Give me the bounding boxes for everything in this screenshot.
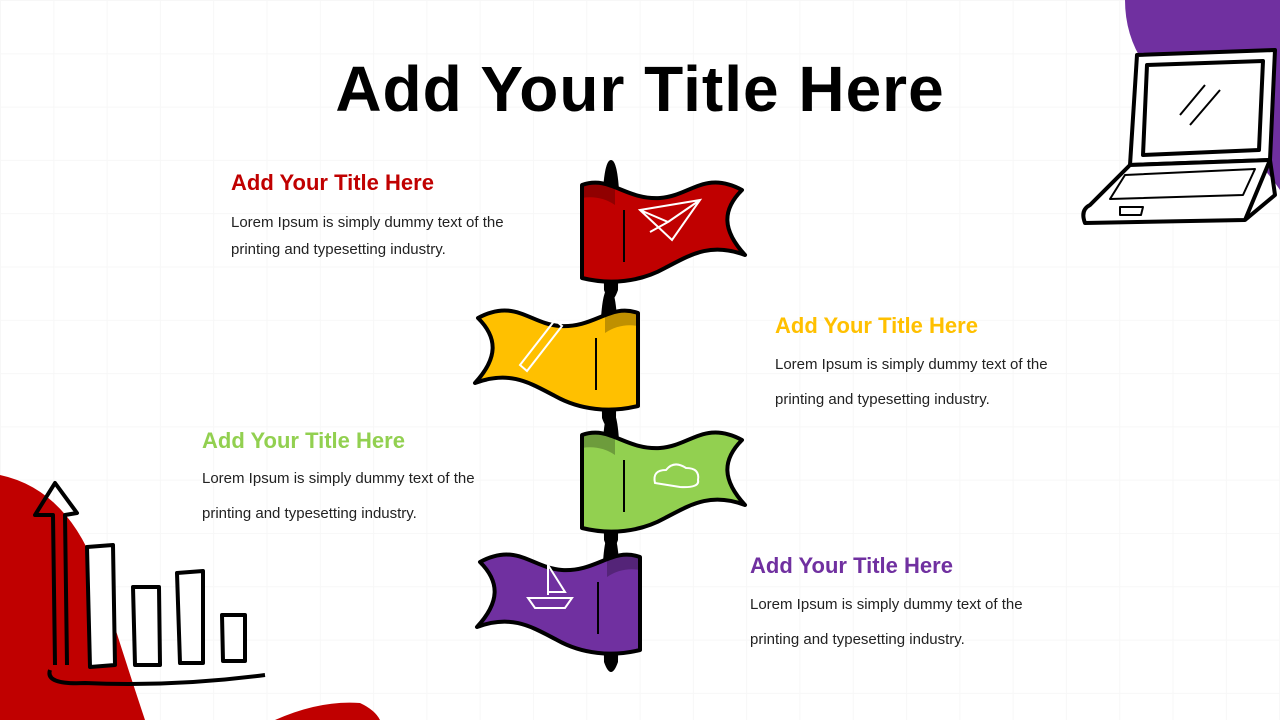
- text block 4: Add Your Title Here: [750, 553, 953, 578]
- text block 1: [231, 170, 504, 258]
- text block 3: Add Your Title Here: [202, 428, 405, 453]
- text block 2: [775, 313, 1048, 408]
- text block 2: printing and typesetting industry.: [775, 391, 990, 408]
- text block 1: printing and typesetting industry.: [231, 241, 446, 258]
- text block 4: printing and typesetting industry.: [750, 631, 965, 648]
- flag red: [582, 160, 745, 300]
- flag yellow: [475, 288, 638, 428]
- flag purple: [477, 532, 640, 672]
- text block 2: Lorem Ipsum is simply dummy text of the: [775, 356, 1048, 373]
- text block 1: Add Your Title Here: [231, 170, 434, 195]
- icon: laptop: [1081, 48, 1277, 225]
- text block 3: [202, 428, 475, 522]
- flag green: [582, 410, 745, 550]
- title: Add Your Title Here: [335, 53, 945, 125]
- text block 4: Lorem Ipsum is simply dummy text of the: [750, 596, 1023, 613]
- text block 3: Lorem Ipsum is simply dummy text of the: [202, 470, 475, 487]
- text block 1: Lorem Ipsum is simply dummy text of the: [231, 214, 504, 231]
- icon: bar chart: [33, 480, 266, 686]
- text block 2: Add Your Title Here: [775, 313, 978, 338]
- text block 3: printing and typesetting industry.: [202, 505, 417, 522]
- text block 4: [750, 553, 1023, 648]
